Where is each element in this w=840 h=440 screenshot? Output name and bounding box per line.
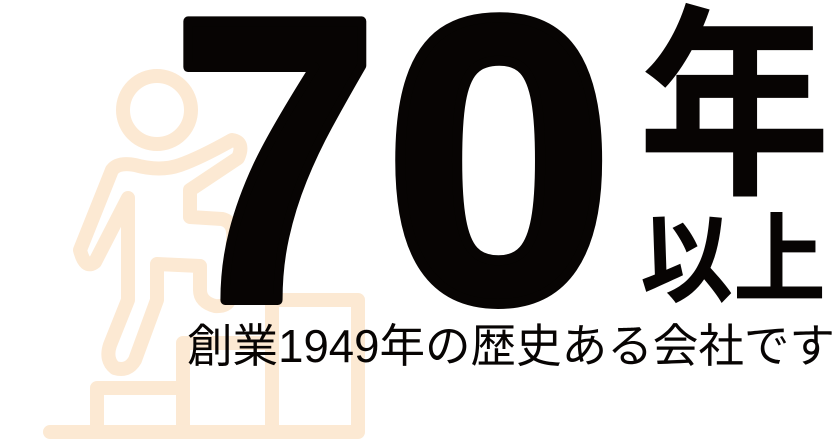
- icon: person climbing stairs: [50, 76, 358, 432]
- subtitle: 創業1949年の歴史ある会社です: [187, 320, 835, 372]
- heading: 以上: 以上: [640, 205, 826, 315]
